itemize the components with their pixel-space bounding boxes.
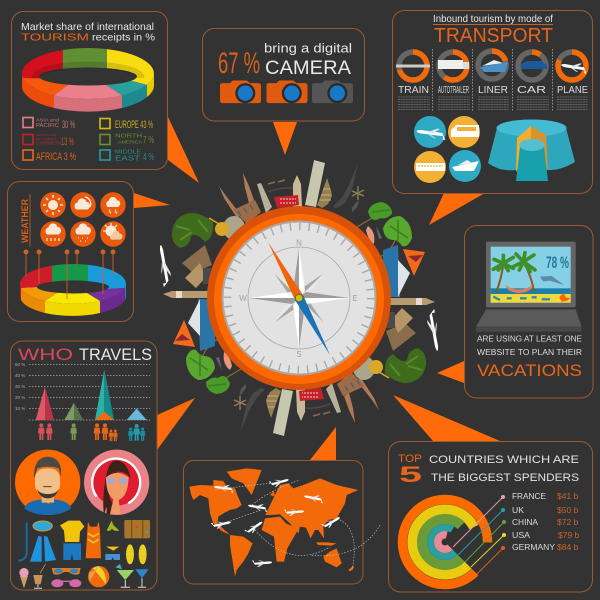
country labels: USA	[512, 530, 530, 540]
arrow: map pointer	[310, 427, 336, 460]
mode labels: LINER	[478, 84, 508, 96]
flight routes	[215, 480, 380, 570]
axis labels: 30 %	[15, 384, 25, 389]
travel items	[18, 520, 150, 588]
icon: cocktail	[115, 564, 134, 587]
compass star	[249, 248, 349, 348]
icon: shirt	[60, 521, 84, 542]
arrow: camera pointer	[273, 122, 297, 155]
heading: biggest spenders: THE BIGGEST SPENDERS	[431, 472, 579, 484]
arrow: transport pointer	[429, 193, 485, 225]
axis labels: 10 %	[15, 406, 25, 411]
3d cylinder chart	[488, 120, 575, 181]
legend: AMERICA	[118, 140, 143, 146]
icon: sunglasses pink	[51, 579, 81, 587]
heading: tourism: TOURISM	[21, 32, 89, 44]
country labels: FRANCE	[512, 491, 546, 501]
axis labels	[15, 362, 25, 411]
mode labels: AUTOTRAILER	[438, 84, 469, 96]
axis labels: 50 %	[15, 362, 25, 367]
icon: fins	[30, 536, 56, 562]
spend values: $50 b	[557, 505, 579, 515]
legend: NORTH	[115, 134, 142, 140]
ring chart: train	[396, 52, 430, 80]
legend: 4 %	[143, 152, 154, 163]
ring chart: autotrailer	[438, 52, 469, 80]
label: weather: WEATHER	[20, 199, 31, 243]
icon: rain cloud	[40, 221, 66, 247]
heading: vacations: VACATIONS	[477, 361, 582, 380]
compass needle	[268, 242, 330, 355]
legend: 7 %	[143, 135, 154, 146]
panel: camera	[202, 28, 364, 121]
pyramid bar chart	[36, 369, 147, 420]
text: website usage	[477, 334, 582, 357]
text: camera: CAMERA	[265, 58, 351, 79]
compass with world landmarks	[157, 160, 441, 436]
legend: EAST	[115, 156, 141, 162]
spend values	[557, 491, 580, 552]
legend: MIDDLE	[115, 150, 141, 156]
ring chart: liner	[478, 51, 508, 79]
country labels: GERMANY	[512, 542, 555, 552]
spend values: $84 b	[557, 542, 579, 552]
compass letters	[239, 238, 358, 359]
icon: ship badge	[449, 150, 481, 182]
label: top: TOP	[398, 453, 422, 465]
legend: AFRICA 3 %	[36, 151, 76, 163]
icon: sun	[40, 192, 66, 218]
text: website usage: WEBSITE TO PLAN THEIR	[477, 348, 582, 357]
weather donut chart	[20, 264, 126, 316]
icon: sun behind cloud	[100, 221, 126, 247]
icon: ice cream	[19, 568, 29, 588]
ring chart: plane	[558, 52, 588, 80]
icon: shorts	[63, 543, 81, 560]
icon: snow cloud	[70, 221, 96, 247]
arrow: market pointer	[168, 117, 199, 183]
stat: 78 percent: 78 %	[546, 253, 569, 272]
arrow: top five pointer	[393, 395, 500, 441]
country labels: CHINA	[512, 517, 538, 527]
axis labels: 40 %	[15, 373, 25, 378]
legend: EUROPE 43 %	[115, 119, 153, 131]
donut chart	[22, 48, 154, 112]
heading: market share: Market share of international	[21, 21, 154, 33]
panel: who travels	[10, 341, 157, 590]
planes on map	[211, 477, 342, 567]
legend: CENTRAL AND	[36, 133, 56, 137]
legend: SOUTH AMERICA	[36, 137, 56, 141]
portrait: man	[15, 450, 80, 515]
compass letters: W	[239, 294, 247, 303]
icon: beach ball	[88, 566, 109, 587]
icon: snorkel	[18, 523, 27, 561]
arrow: who travels pointer	[157, 398, 195, 450]
landmarks: upper half	[157, 160, 425, 298]
portrait: woman	[84, 450, 149, 515]
text: bring a digital: bring a digital	[264, 40, 352, 56]
country labels	[512, 491, 555, 552]
text: website usage: ARE USING AT LEAST ONE	[477, 334, 582, 344]
stat: 67 percent: 67 %	[218, 47, 260, 80]
spend values: $72 b	[557, 517, 579, 527]
compass letters: N	[296, 238, 302, 248]
world map continents	[189, 468, 358, 577]
label: 5: 5	[399, 462, 422, 487]
legend: ASIA and	[36, 118, 60, 122]
icon: moon cloud	[70, 192, 96, 218]
panel: weather	[8, 182, 134, 322]
legend: 30 %	[62, 119, 75, 131]
icon: dress	[86, 522, 101, 558]
icon: diving mask	[33, 521, 52, 531]
country labels: UK	[512, 505, 524, 515]
people icons	[38, 423, 145, 441]
icon: bus badge	[414, 151, 446, 183]
heading: receipts: receipts in %	[92, 32, 155, 44]
compass letters: S	[296, 350, 302, 359]
spend values: $41 b	[557, 491, 579, 501]
panel: vacations	[464, 226, 593, 398]
heading: travels: TRAVELS	[79, 345, 152, 364]
radial bar chart	[385, 482, 505, 600]
landmarks: lower half	[173, 298, 441, 436]
legend: 13 %	[61, 136, 74, 148]
panel: top five	[385, 442, 592, 600]
icon: van badge	[448, 116, 480, 148]
heading: who: WHO	[18, 345, 73, 364]
heading: biggest spenders: COUNTRIES WHICH ARE	[429, 454, 579, 466]
compass rings	[207, 206, 391, 390]
icon: plane badge	[414, 116, 447, 148]
panel: transport	[392, 10, 592, 194]
mode labels: PLANE	[557, 84, 588, 96]
mode labels	[398, 84, 588, 96]
panel: market share	[12, 12, 168, 170]
axis labels: 20 %	[15, 395, 25, 400]
icon: martini	[135, 569, 149, 587]
ring chart: car	[518, 52, 547, 80]
icon: flip flops	[126, 544, 147, 564]
icon: bikini	[105, 521, 120, 560]
laptop illustration	[476, 242, 582, 332]
legend: PACIFIC	[36, 123, 59, 129]
legend	[23, 118, 154, 163]
weather pins	[24, 250, 115, 299]
mode labels: CAR	[517, 84, 547, 96]
spend values: $79 b	[558, 530, 580, 540]
mode labels: TRAIN	[398, 84, 429, 96]
legend: CARRIBEAN	[36, 140, 61, 146]
arrow: weather pointer	[134, 193, 170, 208]
compass letters: E	[352, 294, 358, 303]
arrow: vacation pointer	[437, 361, 464, 383]
heading: biggest spenders	[429, 454, 579, 484]
panel: world map	[184, 460, 380, 584]
heading: transport: TRANSPORT	[434, 25, 553, 47]
icon: storm cloud	[100, 192, 126, 218]
icon: three cameras	[220, 80, 353, 103]
icon: iced drink	[33, 564, 46, 588]
icon: suitcase	[124, 520, 150, 538]
leader lines	[453, 495, 506, 574]
icon: sunglasses	[52, 568, 81, 575]
heading: inbound tourism: Inbound tourism by mode of	[433, 13, 553, 25]
